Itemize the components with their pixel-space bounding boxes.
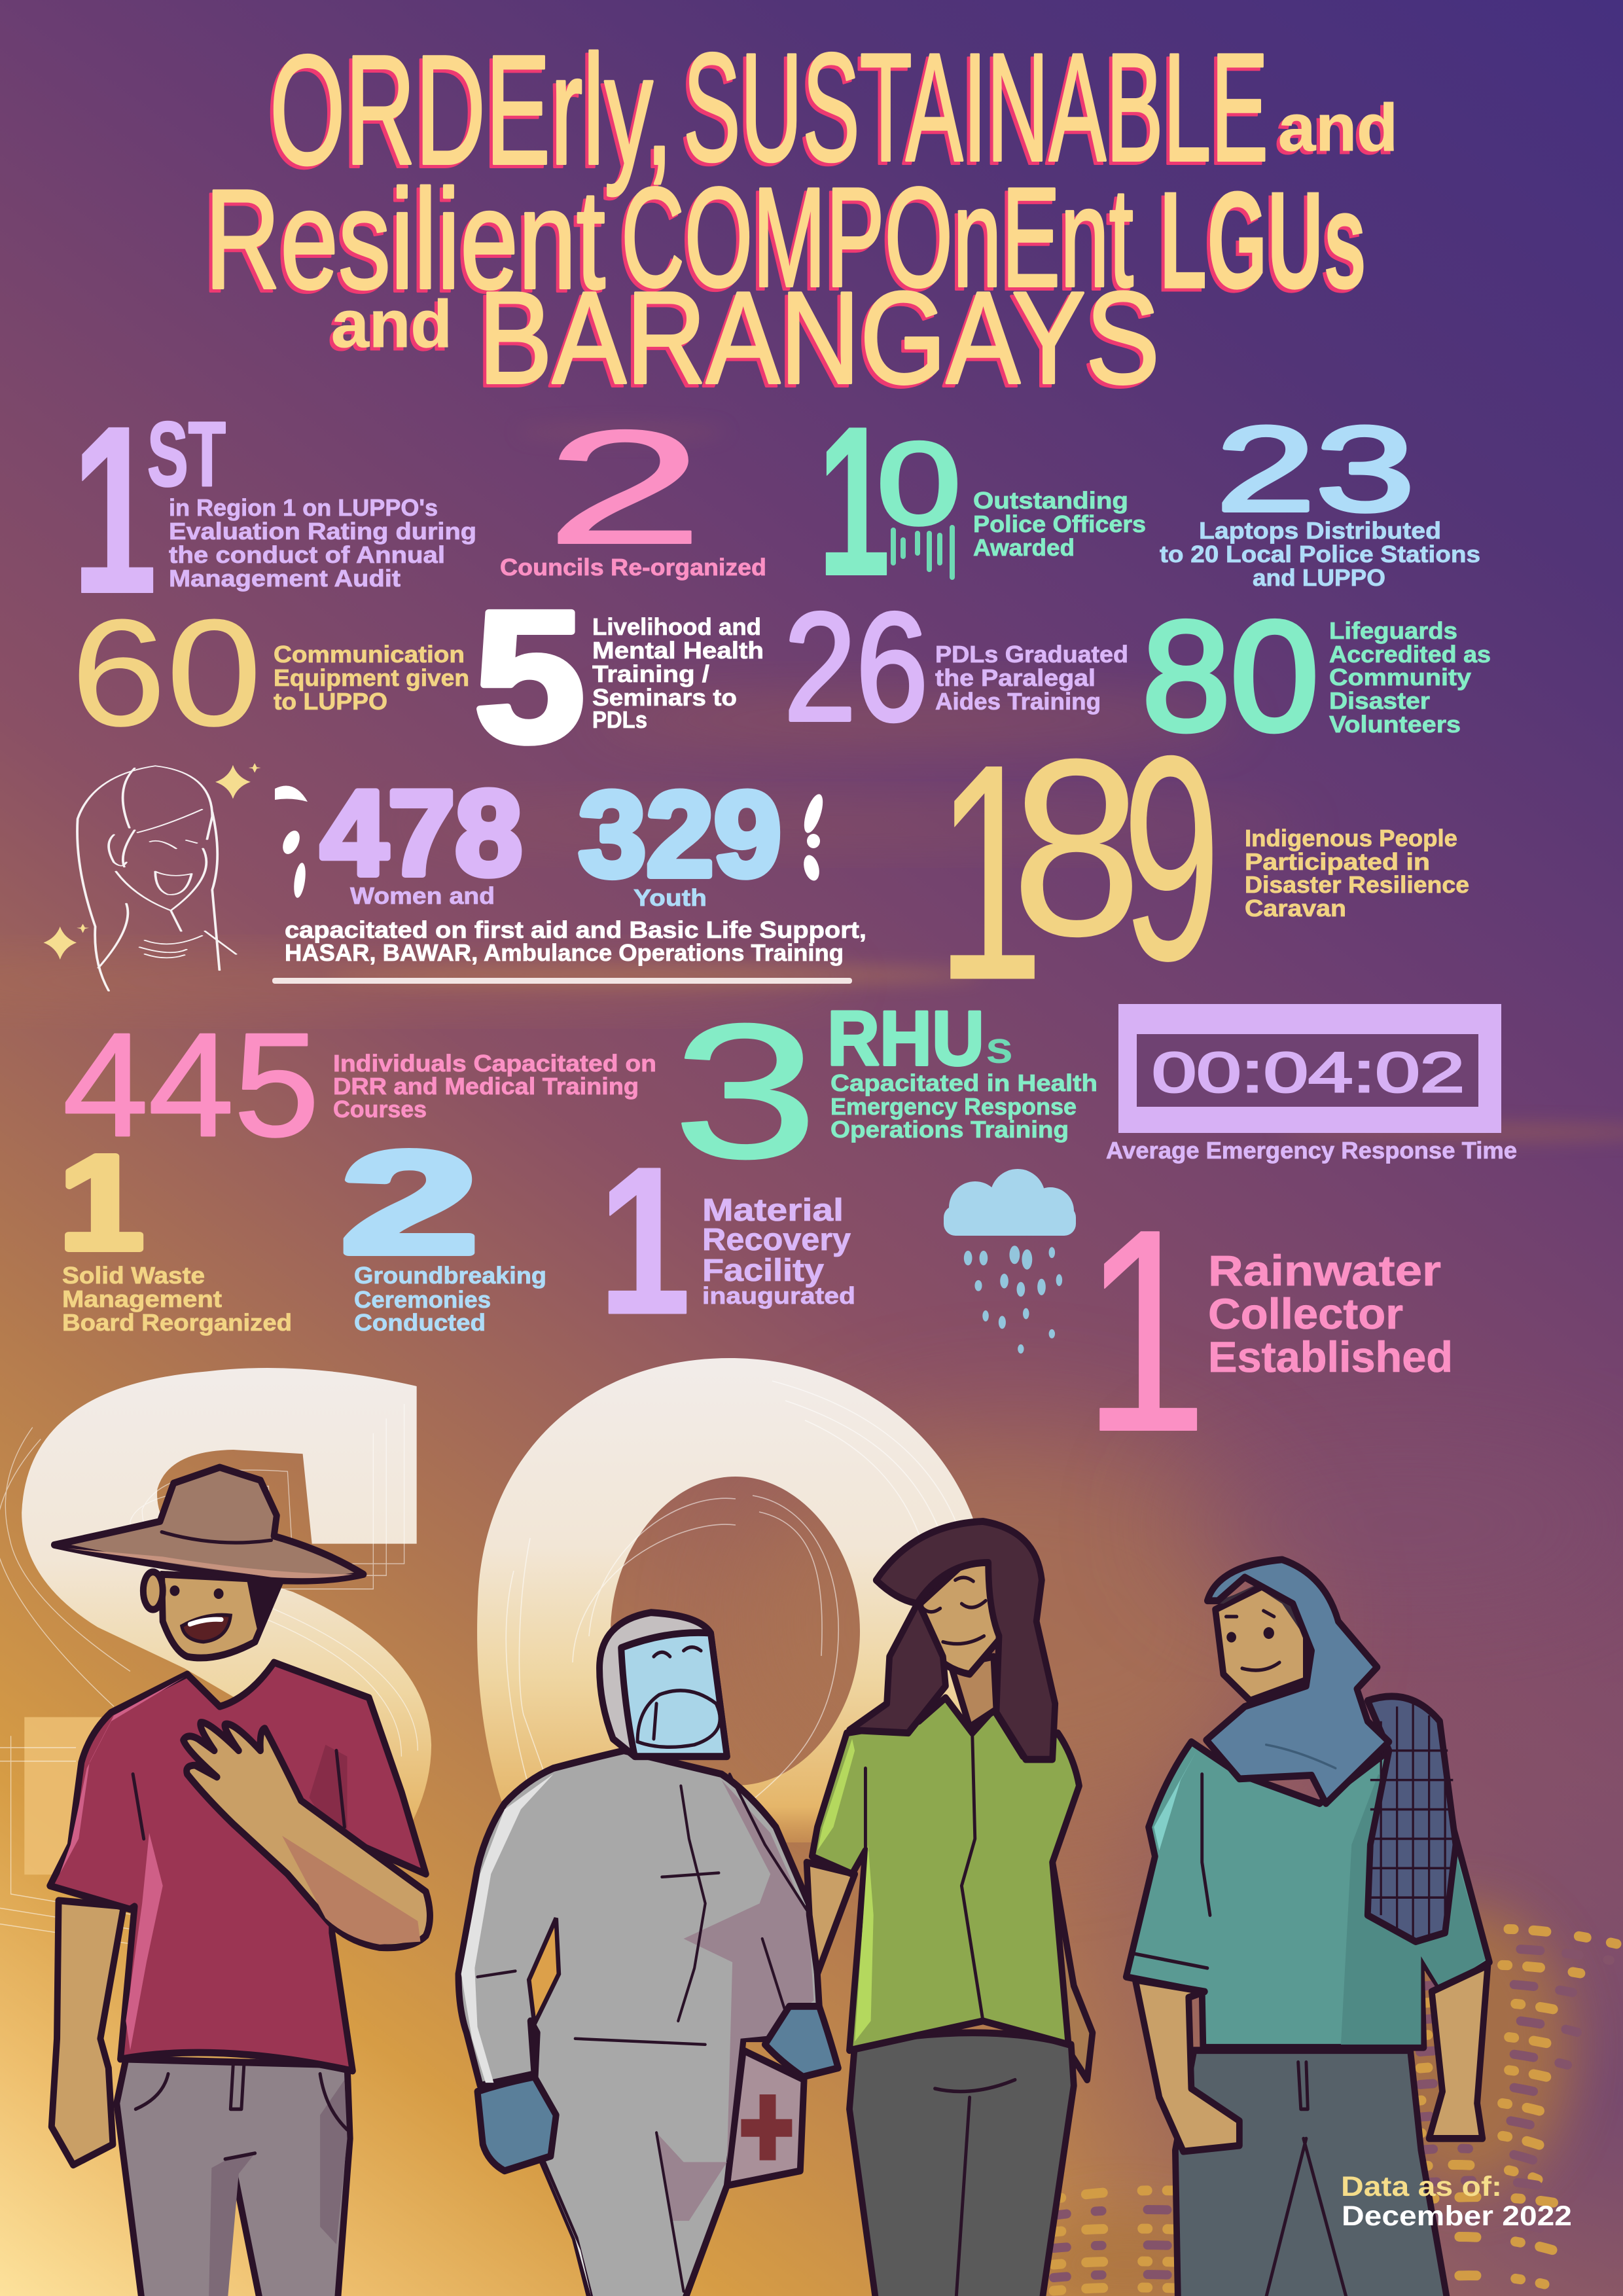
data date note: Data as of: (1341, 2171, 1502, 2202)
caption (973, 487, 1146, 561)
title line 1 (270, 21, 1398, 197)
caption (333, 1050, 656, 1122)
number 189: 1 (936, 700, 1044, 1044)
pants (116, 2059, 350, 2296)
caption: Laptops Distributed (1199, 517, 1441, 544)
caption: Rainwater (1208, 1246, 1441, 1295)
number 189: 9 (1122, 696, 1221, 1021)
stat: 2 councils (500, 396, 766, 581)
stat: 445 individuals (63, 1002, 656, 1167)
data date note: December 2022 (1342, 2200, 1572, 2232)
arm and hand on chest (183, 1723, 430, 1948)
RHUs label: s (986, 1023, 1013, 1073)
caption (1160, 517, 1480, 591)
character: man with straw hat and red shirt (50, 1467, 430, 2296)
stat: 1 rainwater collector (1083, 1170, 1453, 1492)
caption (1208, 1246, 1453, 1381)
number 3: 3 (673, 984, 818, 1198)
caption: the conduct of Annual (169, 541, 445, 568)
caption: Ceremonies (354, 1286, 491, 1313)
caption: Aides Training (935, 688, 1101, 715)
number 23: 23 (1216, 401, 1415, 536)
scarf (1206, 1560, 1389, 1804)
number 189: 8 (1011, 706, 1142, 988)
caption: HASAR, BAWAR, Ambulance Operations Training (285, 939, 844, 966)
caption: Evaluation Rating during (169, 518, 476, 545)
stat: 478 women and 329 youth (272, 765, 866, 984)
illustration: woman line art with sparkles (43, 763, 261, 991)
caption: Groundbreaking (354, 1262, 546, 1289)
hair (849, 1521, 1055, 1759)
caption: and LUPPO (1253, 564, 1385, 591)
hat (54, 1467, 363, 1581)
caption: Established (1208, 1333, 1453, 1381)
hood and visor (599, 1613, 727, 1757)
stat: 26 PDLs graduated (784, 581, 1128, 753)
timer frame (1118, 1004, 1501, 1133)
letter S (0, 1368, 431, 1945)
caption: to LUPPO (274, 688, 387, 715)
caption: PDLs (592, 706, 647, 733)
caption: Mental Health (592, 637, 764, 664)
caption (1329, 617, 1491, 738)
caption: Community (1329, 664, 1471, 691)
neck and face (951, 1657, 996, 1727)
number 445: 445 (63, 1002, 319, 1167)
caption: Disaster (1329, 687, 1430, 714)
caption: Councils Re-organized (500, 554, 766, 581)
caption: DRR and Medical Training (333, 1073, 639, 1100)
number 80: 80 (1142, 590, 1319, 763)
caption: Board Reorganized (62, 1309, 292, 1336)
caption: Outstanding (973, 487, 1128, 514)
timer screen (1137, 1034, 1478, 1107)
label women: Women and (350, 882, 495, 909)
caption: Volunteers (1329, 711, 1461, 738)
caption: the Paralegal (935, 664, 1096, 691)
caption (592, 613, 764, 733)
net bag (1368, 1696, 1455, 1942)
title (205, 21, 1398, 411)
caption (285, 916, 866, 966)
caption: Training / (592, 660, 709, 687)
title line 1: and (1278, 90, 1398, 165)
title line 2 (205, 158, 1366, 318)
ground speckle texture (1021, 1905, 1616, 2296)
stat: 80 lifeguards (1142, 590, 1491, 763)
title line 2: LGUs (1160, 162, 1366, 317)
stat: 10 police officers (818, 382, 1146, 620)
caption: Awarded (973, 534, 1075, 561)
number 1: 1 (59, 1128, 144, 1278)
caption: inaugurated (702, 1282, 855, 1309)
caption: Solid Waste (62, 1262, 205, 1289)
caption: Courses (333, 1096, 427, 1122)
caption: Material (702, 1193, 844, 1228)
stat: average emergency response timer (1106, 1004, 1517, 1164)
caption: Individuals Capacitated on (333, 1050, 656, 1077)
caption: Disaster Resilience (1245, 871, 1469, 898)
title line 2: Resilient (205, 160, 605, 318)
number 10: 1 (818, 382, 890, 620)
pants (1175, 2051, 1448, 2296)
shirt (812, 1698, 1079, 2051)
gloves (478, 2077, 556, 2171)
number 1st: 1 (72, 377, 157, 643)
character: fisherman with blue scarf and net (1126, 1560, 1489, 2296)
character: woman in green shirt (807, 1521, 1092, 2296)
stat: 23 laptops (1160, 401, 1480, 591)
caption: Participated in (1245, 848, 1430, 875)
caption: Conducted (354, 1309, 486, 1336)
caption (702, 1193, 855, 1309)
caption: Seminars to (592, 684, 737, 711)
caption: Police Officers (973, 511, 1146, 537)
caption: Indigenous People (1245, 825, 1457, 852)
shirt (1126, 1742, 1489, 2047)
stat: 3 RHUs (673, 984, 1097, 1198)
caption: to 20 Local Police Stations (1160, 541, 1480, 567)
number 1st: ST (147, 403, 226, 505)
number 2: 2 (340, 1122, 479, 1284)
mouth (182, 1615, 230, 1642)
title line 3: BARANGAYS (478, 265, 1160, 411)
head (162, 1574, 281, 1658)
suit (459, 1751, 819, 2296)
caption (274, 641, 469, 715)
arm behind (807, 1862, 855, 1974)
stat: 5 livelihood trainings (474, 573, 764, 781)
title line 1: ORDErly, (270, 24, 673, 197)
sparkles (43, 763, 261, 960)
caption (354, 1262, 546, 1336)
title line 3: and (331, 287, 452, 361)
caption (62, 1262, 292, 1336)
caption (169, 494, 476, 592)
caption: Lifeguards (1329, 617, 1457, 644)
caption: PDLs Graduated (935, 641, 1128, 668)
caption: Facility (702, 1253, 824, 1288)
number 26: 26 (784, 581, 928, 753)
data date note (1341, 2171, 1572, 2232)
caption: Communication (274, 641, 465, 668)
caption: Operations Training (830, 1116, 1069, 1143)
caption: Equipment given (274, 664, 469, 691)
caption: Collector (1208, 1289, 1403, 1338)
caption: in Region 1 on LUPPO's (169, 494, 438, 521)
shirt (50, 1662, 426, 2071)
RHUs label: RHU (827, 996, 984, 1082)
caption (1245, 825, 1469, 922)
caption: Livelihood and (592, 613, 761, 640)
caption: Recovery (702, 1223, 851, 1257)
caption: Accredited as (1329, 641, 1491, 668)
number 60: 60 (71, 588, 262, 758)
caption (935, 641, 1128, 715)
accent marks (275, 785, 827, 899)
caption: capacitated on first aid and Basic Life Support, (285, 916, 866, 943)
caption: Emergency Response (830, 1093, 1077, 1120)
number 1: 1 (1083, 1170, 1207, 1492)
label youth: Youth (633, 884, 707, 911)
caption (830, 1069, 1097, 1143)
stat: 1 solid waste board (59, 1128, 292, 1336)
title line 2: COMPOnEnt (621, 158, 1133, 316)
arms (1135, 1980, 1240, 2151)
stat: 189 indigenous people (936, 696, 1469, 1044)
character: health worker in hazmat suit (459, 1613, 838, 2296)
icon: rain cloud (944, 1169, 1076, 1354)
number 478: 478 (321, 765, 522, 900)
timer digits: 00:04:02 (1152, 1041, 1465, 1104)
stat: 2 groundbreaking ceremonies (340, 1122, 546, 1336)
pants (849, 2033, 1074, 2296)
letter O (477, 1358, 988, 1842)
number 189 (936, 696, 1221, 1044)
caption: Capacitated in Health (830, 1069, 1097, 1096)
decorative large letters SO (0, 1358, 988, 1945)
face (1215, 1583, 1306, 1700)
stat: 1 material recovery facility (599, 1123, 855, 1357)
stat: 1st in Region 1 (72, 377, 476, 643)
number 329: 329 (579, 766, 781, 901)
stat: 60 communication equipment (71, 588, 469, 758)
caption: Management Audit (169, 565, 401, 592)
left arm (52, 1901, 124, 2165)
caption: Management (62, 1285, 222, 1312)
medical kit (727, 2051, 804, 2185)
caption: Caravan (1245, 895, 1346, 922)
number 2: 2 (544, 396, 705, 578)
number 10: 0 (877, 418, 961, 548)
number 5: 5 (474, 573, 585, 781)
number 1: 1 (599, 1123, 690, 1357)
caption: Average Emergency Response Time (1106, 1137, 1517, 1164)
